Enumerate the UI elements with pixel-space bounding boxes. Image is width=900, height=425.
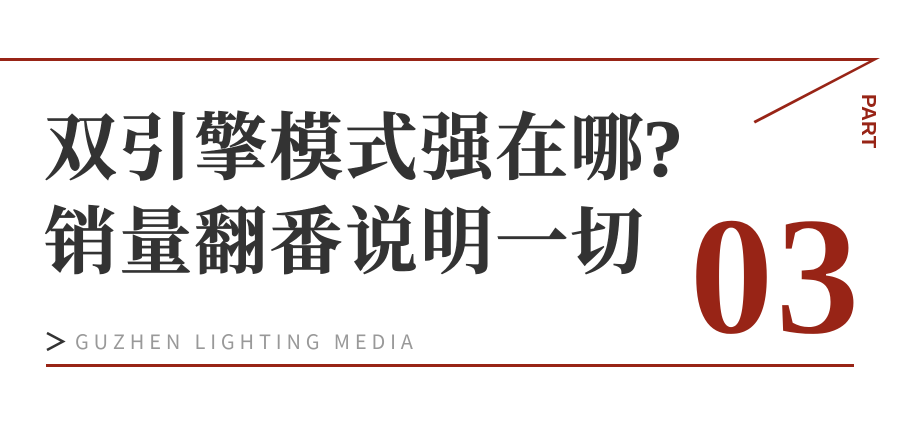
title line 1: 双引擎模式强在哪: [44, 89, 646, 194]
title line 2: 销量翻番说明一切: [44, 183, 646, 288]
chevron icon: [46, 332, 66, 352]
subtitle: GUZHEN LIGHTING MEDIA: [75, 326, 418, 355]
number 03: 03: [689, 182, 861, 370]
PART label: PART: [857, 94, 880, 148]
bottom rule: [46, 364, 854, 367]
title line 1: ?: [643, 103, 686, 194]
